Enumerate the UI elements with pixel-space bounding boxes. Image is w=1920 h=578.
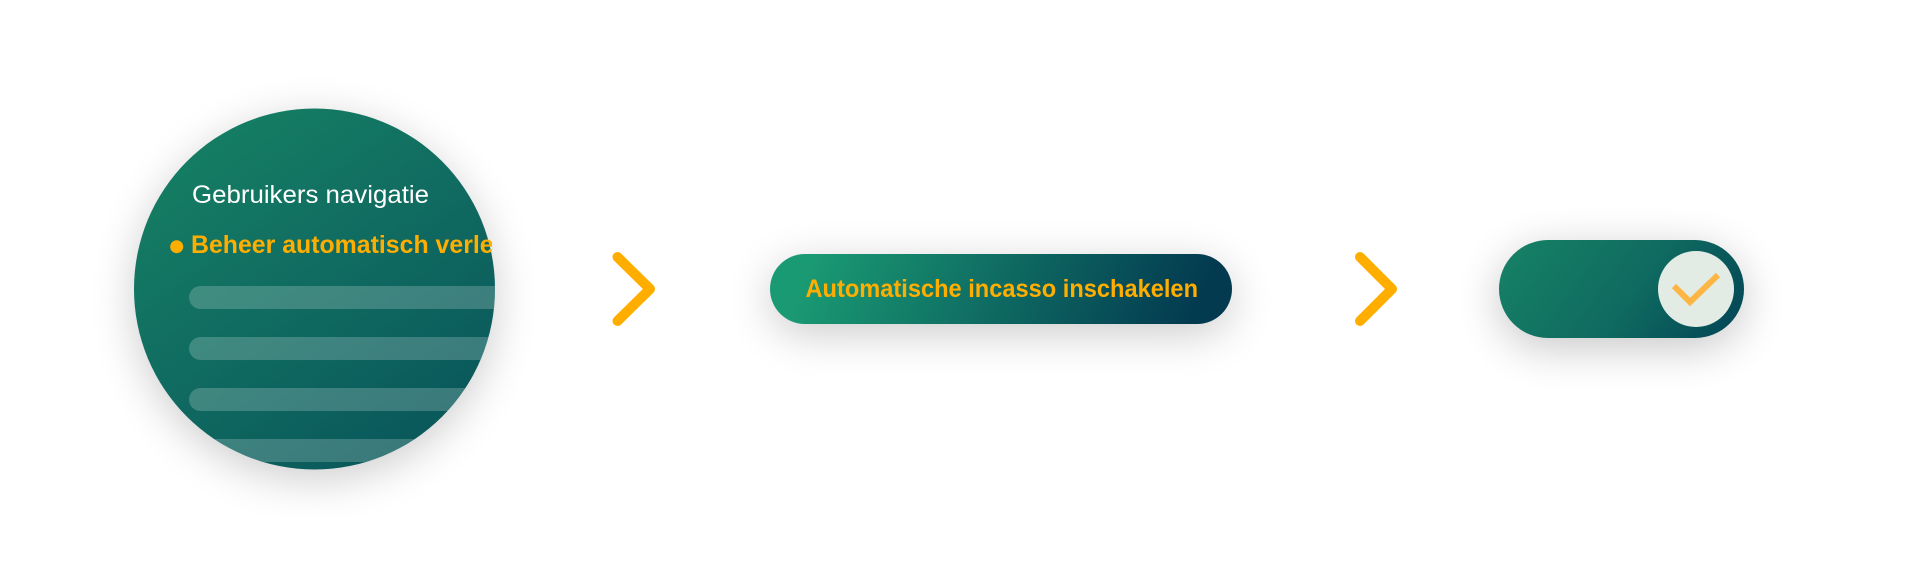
arrow: first chevron bbox=[618, 257, 650, 321]
panel: navigation circle bbox=[134, 108, 553, 479]
panel: incasso button bbox=[770, 254, 1232, 334]
active menu item: Beheer automatisch verlengen bbox=[191, 231, 553, 259]
panel: toggle switch bbox=[1499, 240, 1744, 348]
button label: Automatische incasso inschakelen bbox=[806, 275, 1198, 303]
icon: active bullet bbox=[170, 240, 183, 253]
toggle knob bbox=[1658, 251, 1734, 327]
arrow: second chevron bbox=[1360, 257, 1392, 321]
icon: check mark bbox=[1674, 275, 1718, 302]
menu placeholder bars bbox=[189, 286, 529, 462]
heading: Gebruikers navigatie: Gebruikers navigatie bbox=[192, 181, 429, 209]
